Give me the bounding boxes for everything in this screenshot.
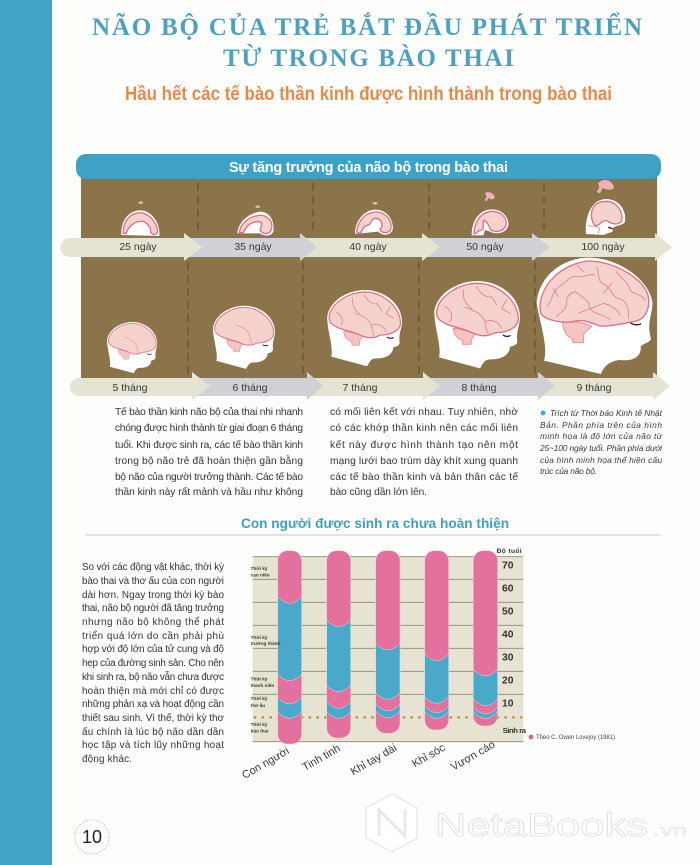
arrow: 9 months: [500, 372, 670, 400]
embryo: 40 days: [355, 202, 393, 235]
text block: left paragraph: thiết sau sinh. Vì thế, thời kỳ thơ: [82, 713, 225, 724]
panel heading bar: [76, 154, 661, 179]
source note: 25~100 ngày tuổi. Phần phía dưới: [539, 443, 663, 453]
text block: left paragraph: dài hơn. Ngay trong thời kỳ bào: [82, 590, 224, 601]
head: 7 months: [327, 290, 402, 366]
arrow: 5 months: [70, 372, 210, 400]
chart background: [253, 557, 523, 742]
chart source legend: Theo C. Owen Lovejoy (1981): [536, 735, 615, 741]
age axis: 70: [502, 560, 514, 571]
species labels: [240, 739, 497, 782]
life stage labels: bào thai: [251, 728, 269, 733]
species labels: Khỉ tay dài: [349, 742, 399, 778]
arrow: 35 days: 35 ngày: [234, 241, 272, 253]
text block: first column: thần kinh này rất mảnh và hầu như không: [115, 486, 303, 498]
arrow: 6 months: 6 tháng: [232, 382, 268, 394]
arrow: 40 days: [300, 233, 440, 261]
text block: left paragraph: bào thai và thơ ấu của con người: [82, 576, 224, 587]
species labels: Vượn cáo: [449, 739, 497, 773]
watermark: NetaBooks.vn: .vn: [653, 821, 687, 840]
age axis: 60: [502, 583, 514, 594]
arrow: 5 months: 5 tháng: [112, 382, 148, 394]
watermark: NetaBooks.vn: NetaBooks: [435, 807, 648, 843]
month arrows: [70, 372, 670, 400]
page number: 10: [82, 827, 102, 847]
text block: left paragraph: So với các động vật khác, thời kỳ: [82, 562, 224, 573]
source note: trúc của não bộ.: [540, 466, 597, 476]
source note: Bản. Phần phía trên của hình: [540, 420, 662, 430]
head: 6 months: [213, 306, 275, 369]
embryo: 100 days: [586, 180, 625, 235]
life stage labels: Thời kỳ: [251, 722, 268, 727]
source note: Trích từ Thời báo Kinh tế Nhật: [550, 408, 663, 418]
text block: left paragraph: thai, não bộ người đã tăng trưởng: [82, 603, 224, 614]
life stage labels: Thời kỳ: [251, 677, 268, 682]
life stage labels: trưởng thành: [251, 641, 281, 646]
age axis: 40: [502, 629, 514, 640]
text block: left paragraph: học tập và tích lũy những hoạt: [82, 740, 224, 751]
age axis: 20: [502, 676, 514, 687]
embryo: 25 days: [121, 201, 159, 236]
source note: minh họa là độ lớn của não từ: [540, 431, 663, 441]
text block: left paragraph: động khác.: [82, 754, 132, 765]
bar: Con người: [278, 551, 302, 744]
section heading: Con người được sinh ra chưa hoàn thiện: [241, 516, 509, 531]
text block: second column: có các khớp thần kinh nên các mối liên: [330, 422, 518, 434]
title: [92, 12, 642, 72]
text block: left paragraph: [82, 562, 225, 765]
life stage labels: Thời kỳ: [251, 635, 268, 640]
age axis: 50: [502, 606, 514, 617]
bar: Khỉ tay dài: [376, 551, 400, 733]
text block: left paragraph: khi sinh ra, bộ não vẫn chưa được: [82, 672, 224, 683]
text block: left paragraph: nhưng não bộ không thể phát: [82, 617, 224, 628]
left colour band: [0, 0, 52, 865]
head: 9 months: [537, 258, 652, 374]
age axis: 30: [502, 652, 514, 663]
species labels: Tinh tinh: [300, 742, 343, 774]
embryo: 50 days: [472, 192, 508, 235]
text block: second column: bào cũng dần lớn lên.: [330, 486, 427, 498]
text block: first column: trong bộ não trẻ đã hoàn thiện gần bằng: [115, 454, 303, 467]
arrow: 100 days: [500, 233, 672, 261]
arrow: 50 days: 50 ngày: [466, 241, 504, 253]
arrow: 100 days: 100 ngày: [581, 241, 625, 253]
text block: second column: [330, 406, 518, 498]
text block: left paragraph: ấu chính là lúc bộ não dần dần: [82, 727, 224, 738]
text block: first column: tuổi. Khi được sinh ra, các tế bào thần kinh: [115, 439, 303, 451]
arrow: 7 months: 7 tháng: [342, 382, 378, 394]
head: 5 months: [107, 322, 157, 373]
source note: [539, 408, 663, 476]
panel background: [81, 176, 657, 380]
text block: second column: kết này được hình thành tạo nên một: [330, 439, 518, 451]
age axis: 10: [502, 699, 514, 710]
bar: Vượn cáo: [473, 551, 498, 726]
panel: brain growth in the womb: [60, 154, 672, 400]
arrow: 50 days: [420, 233, 550, 261]
panel heading bar: Sự tăng trưởng của não bộ trong bào thai: [229, 160, 508, 176]
life stage labels: Thời kỳ: [251, 696, 268, 701]
source note: của hình minh họa thể hiện cấu: [540, 455, 662, 465]
arrow: 8 months: 8 tháng: [461, 382, 497, 394]
watermark: NetaBooks.vn: [366, 794, 687, 852]
arrow: 8 months: [420, 372, 555, 400]
age axis: Sinh ra: [503, 726, 527, 735]
bar: Khỉ sóc: [425, 551, 449, 730]
species labels: Con người: [240, 745, 292, 782]
text block: first column: [115, 406, 303, 498]
day arrows: [60, 233, 672, 261]
arrow: 6 months: [190, 372, 323, 400]
life stage labels: thơ ấu: [251, 702, 265, 708]
life stage labels: thanh niên: [251, 683, 274, 688]
embryo: 35 days: [237, 205, 274, 236]
chart: life stages by species: [240, 547, 527, 782]
text block: left paragraph: những phản xạ và hoạt động cần: [82, 699, 224, 710]
life stage labels: [251, 566, 281, 733]
subtitle: Hầu hết các tế bào thần kinh được hình thành trong bào thai: [125, 84, 612, 105]
text block: first column: bộ não của người trưởng thành. Các tế bào: [115, 471, 303, 483]
arrow: 25 days: 25 ngày: [119, 241, 157, 253]
arrow: 40 days: 40 ngày: [349, 241, 387, 253]
text block: left paragraph: triển quá lớn do cần phải phù: [82, 631, 224, 642]
text block: second column: mạng lưới bao trùm dày khít xung quanh: [330, 456, 518, 467]
arrow: 9 months: 9 tháng: [576, 382, 612, 394]
text block: first column: chóng được hình thành từ giai đoạn 6 tháng: [115, 423, 303, 434]
text block: second column: các tế bào thần kinh và bản thân các tế: [330, 471, 518, 483]
bar: Tinh tinh: [327, 551, 351, 738]
arrow: 35 days: [184, 233, 317, 261]
page number: [75, 820, 109, 854]
life stage labels: cao niên: [251, 572, 270, 577]
age axis: Độ tuổi: [497, 547, 522, 555]
arrow: 7 months: [300, 372, 440, 400]
species labels: Khỉ sóc: [410, 742, 448, 770]
head: 8 months: [434, 281, 520, 368]
age axis: [497, 547, 527, 735]
arrow: 25 days: [60, 233, 202, 261]
stage dividers: [188, 183, 544, 378]
text block: left paragraph: hợp với độ lớn của tử cung và độ: [82, 644, 224, 655]
title: TỪ TRONG BÀO THAI: [223, 44, 514, 72]
text block: left paragraph: hoàn thiện mà mới chỉ có được: [82, 686, 224, 697]
text block: left paragraph: hẹp của đường sinh sản. Cho nên: [82, 658, 224, 669]
life stage labels: Thời kỳ: [251, 566, 268, 571]
text block: first column: Tế bào thần kinh não bộ của thai nhi nhanh: [115, 406, 303, 418]
text block: second column: có mối liên kết với nhau. Tuy nhiên, nhờ: [330, 406, 518, 418]
title: NÃO BỘ CỦA TRẺ BẮT ĐẦU PHÁT TRIỂN: [92, 12, 642, 41]
